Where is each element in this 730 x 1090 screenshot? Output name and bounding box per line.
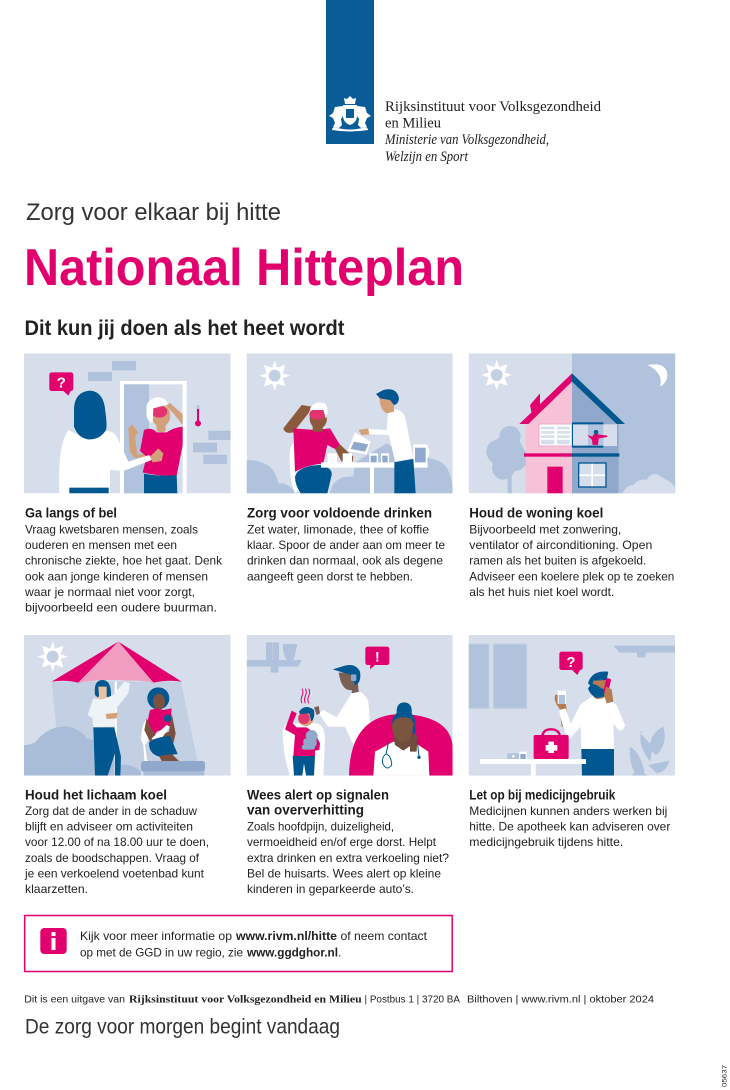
- text block: let op bij medicijngebruik: medicijngebruik tijdens hitte.: [469, 835, 623, 849]
- text block: wees alert op signalen: Zoals hoofdpijn, duizeligheid,: [247, 820, 394, 834]
- section heading: Dit kun jij doen als het heet wordt: [24, 317, 344, 340]
- text block: houd de woning koel: Houd de woning koel: [469, 506, 603, 520]
- text block: houd het lichaam koel: Houd het lichaam koel: [25, 787, 167, 802]
- print code: 05637: [722, 1065, 728, 1087]
- panel: let op bij medicijngebruik illustration: ?: [567, 655, 576, 671]
- text block: ga langs of bel: ouderen en mensen met een: [25, 538, 177, 552]
- callout: more information: Kijk voor meer informatie op: [80, 929, 232, 943]
- subtitle: Zorg voor elkaar bij hitte: [26, 199, 281, 226]
- callout: more information: [25, 916, 452, 972]
- text block: houd de woning koel: Adviseer een koelere plek op te zoeken: [469, 569, 674, 583]
- text block: ga langs of bel: ook aan jonge kinderen of mensen: [25, 569, 208, 583]
- callout: more information: www.ggdghor.nl: [246, 946, 338, 960]
- text block: ga langs of bel: [24, 506, 223, 615]
- footer colophon: Dit is een uitgave van: [24, 994, 125, 1006]
- footer colophon: | Postbus 1 | 3720 BA: [364, 994, 460, 1006]
- text block: houd de woning koel: [469, 506, 674, 599]
- text block: wees alert op signalen: extra drinken en extra verkoeling niet?: [247, 851, 449, 865]
- text block: wees alert op signalen: van oververhitting: [247, 802, 364, 818]
- logo text: organisation names: Rijksinstituut voor Volksgezondheid: [385, 99, 601, 115]
- callout: more information: of neem contact: [340, 929, 428, 943]
- panel: wees alert op signalen illustration: [247, 635, 453, 776]
- text block: zorg voor voldoende drinken: Zet water, limonade, thee of koffie: [247, 522, 429, 536]
- text block: ga langs of bel: Ga langs of bel: [25, 506, 117, 520]
- text block: zorg voor voldoende drinken: Zorg voor voldoende drinken: [247, 506, 432, 520]
- text block: houd het lichaam koel: klaarzetten.: [25, 882, 88, 896]
- text block: wees alert op signalen: Bel de huisarts. Wees alert op kleine: [247, 866, 441, 880]
- logo text: organisation names: [384, 99, 601, 165]
- text block: wees alert op signalen: vermoeidheid en/of erge dorst. Helpt: [247, 835, 437, 849]
- text block: wees alert op signalen: [247, 787, 449, 896]
- slogan: De zorg voor morgen begint vandaag: [25, 1016, 340, 1038]
- panel: let op bij medicijngebruik illustration: [469, 635, 675, 776]
- panel: ga langs of bel illustration: ?: [57, 375, 66, 392]
- text block: let op bij medicijngebruik: hitte. De apotheek kan adviseren over: [469, 820, 670, 834]
- text block: houd de woning koel: ventilator of airconditioning. Open: [469, 538, 652, 552]
- text block: zorg voor voldoende drinken: [247, 506, 445, 583]
- text block: houd het lichaam koel: voor 12.00 of na 18.00 uur te doen,: [25, 835, 209, 849]
- panel: houd het lichaam koel illustration: [24, 635, 231, 776]
- text block: houd het lichaam koel: [24, 787, 209, 896]
- text block: zorg voor voldoende drinken: drinken dan normaal, ook als degene: [247, 554, 443, 568]
- text block: houd het lichaam koel: je een verkoelend voetenbad kunt: [24, 866, 205, 880]
- text block: houd de woning koel: Bijvoorbeeld met zonwering,: [469, 522, 621, 536]
- callout: more information: www.rivm.nl/hitte: [235, 929, 337, 943]
- panel: zorg voor voldoende drinken illustration: [247, 353, 453, 493]
- text block: houd het lichaam koel: Zorg dat de ander in de schaduw: [25, 804, 197, 818]
- panel: houd de woning koel illustration: [469, 353, 675, 493]
- title: Nationaal Hitteplan: [24, 239, 464, 297]
- text block: ga langs of bel: chronische ziekte, hoe het gaat. Denk: [25, 554, 223, 568]
- text block: ga langs of bel: Vraag kwetsbaren mensen, zoals: [25, 522, 198, 536]
- panel: wees alert op signalen illustration: !: [375, 648, 380, 664]
- text block: let op bij medicijngebruik: [469, 787, 670, 849]
- text block: houd de woning koel: ramen als het buiten is afgekoeld.: [469, 554, 646, 568]
- logo text: organisation names: Ministerie van Volksgezondheid,: [384, 132, 549, 148]
- text block: wees alert op signalen: Wees alert op signalen: [247, 787, 389, 802]
- text block: wees alert op signalen: kinderen in geparkeerde auto’s.: [247, 882, 414, 896]
- logo text: organisation names: Welzijn en Sport: [385, 149, 469, 165]
- callout: more information: .: [338, 946, 341, 960]
- text block: houd het lichaam koel: zoals de boodschappen. Vraag of: [25, 851, 200, 865]
- footer colophon: Rijksinstituut voor Volksgezondheid en Milieu: [129, 995, 362, 1006]
- text block: ga langs of bel: waar je normaal niet voor zorgt,: [24, 585, 195, 599]
- text block: ga langs of bel: bijvoorbeeld een oudere buurman.: [25, 601, 217, 615]
- footer colophon: [24, 994, 654, 1006]
- text block: let op bij medicijngebruik: Medicijnen kunnen anders werken bij: [469, 804, 667, 818]
- panel: ga langs of bel illustration: [24, 353, 231, 493]
- text block: let op bij medicijngebruik: Let op bij medicijngebruik: [469, 787, 616, 802]
- logo: blue ribbon with coat of arms: [326, 0, 374, 144]
- text block: zorg voor voldoende drinken: klaar. Spoor de ander aan om meer te: [247, 538, 445, 552]
- callout: more information: op met de GGD in uw regio, zie: [80, 946, 243, 960]
- text block: zorg voor voldoende drinken: aangeeft geen dorst te hebben.: [247, 569, 413, 583]
- footer colophon: Bilthoven | www.rivm.nl | oktober 2024: [467, 994, 654, 1006]
- text block: houd het lichaam koel: blijft en adviseer om activiteiten: [25, 820, 193, 834]
- logo text: organisation names: en Milieu: [385, 116, 441, 132]
- text block: houd de woning koel: als het huis niet koel wordt.: [469, 585, 614, 599]
